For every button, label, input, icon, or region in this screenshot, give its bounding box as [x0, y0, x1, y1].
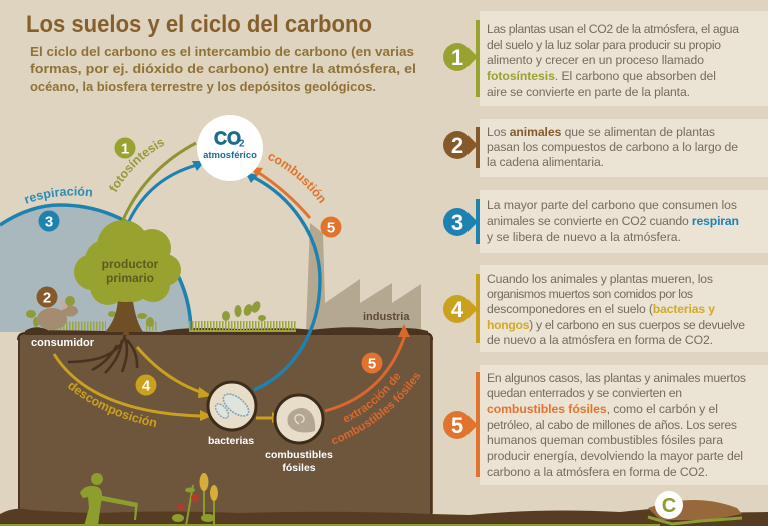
carbon deposit icon — [648, 491, 742, 524]
diagram markers: 3 — [45, 214, 53, 230]
label: respiracion: respiración — [24, 186, 92, 204]
label: combustibles fosiles — [265, 449, 333, 474]
crops — [172, 473, 218, 526]
arc: respiration — [0, 205, 191, 332]
intro text — [30, 44, 416, 94]
tree: productor primario: productor — [102, 257, 159, 271]
panel 4: hongos) y el carbono en sus cuerpos se devuelve — [487, 318, 745, 332]
panel 3: y se libera de nuevo a la atmósfera. — [487, 230, 681, 244]
panel 5 — [443, 365, 768, 485]
label: combustibles fosiles: fósiles — [282, 462, 316, 474]
diagram markers: 5 — [327, 220, 335, 236]
label: combustibles fosiles arc: combustibles fósiles — [332, 373, 420, 444]
farmer — [80, 473, 138, 526]
carbon deposit icon: C — [662, 495, 676, 517]
panel 1: 1 — [451, 45, 463, 70]
CO2 circle: CO — [214, 128, 241, 148]
bottom ground — [0, 509, 768, 526]
label: combustibles fosiles: combustibles — [265, 449, 333, 461]
intro text: formas, por ej. dióxido de carbono) entre la atmósfera, el — [30, 61, 416, 76]
factory silhouette — [306, 223, 421, 332]
arc: combustion — [250, 167, 310, 218]
diagram markers: 2 — [43, 290, 51, 306]
label: combustion: combustión — [268, 154, 324, 204]
panel 3: La mayor parte del carbono que consumen los — [487, 198, 737, 212]
intro text: El ciclo del carbono es el intercambio de carbono (en varias — [30, 44, 414, 59]
panel 4: organismos muertos son comidos por los — [487, 287, 693, 301]
panel 4: de nuevo a la atmósfera en forma de CO2. — [487, 333, 713, 347]
respiration dome — [0, 205, 191, 332]
panel 2: pasan los compuestos de carbono a lo largo de — [487, 140, 738, 154]
panel 2 — [443, 119, 768, 177]
soil block — [18, 327, 433, 518]
panel 2: la cadena alimentaria. — [487, 155, 604, 169]
label: descomposicion: descomposición — [68, 383, 156, 427]
diagram markers: 1 — [121, 140, 129, 158]
panel 5: En algunos casos, las plantas y animales muertos — [487, 371, 746, 385]
arc: blue to CO2 — [129, 161, 205, 221]
panel 5: producir energía, devolviendo la mayor parte del — [487, 449, 743, 463]
panel 1: del suelo y la luz solar para producir su propio — [487, 38, 721, 52]
CO2 circle — [197, 115, 263, 181]
arc: bacteria to CO2 — [245, 172, 320, 390]
panel 5: 5 — [451, 413, 463, 438]
CO2 circle: 2 — [239, 138, 245, 150]
title: Los suelos y el ciclo del carbono — [26, 11, 372, 38]
panel 5: quedan enterrados y se convierten en — [487, 386, 682, 400]
intro text: océano, la biosfera terrestre y los depósitos geológicos. — [30, 79, 376, 94]
decomposition arrowheads — [198, 387, 282, 423]
panel 3 — [443, 190, 768, 253]
panel 5: combustibles fósiles, como el carbón y el — [487, 402, 718, 416]
arcs: decomposition — [54, 347, 274, 418]
label: bacterias: bacterias — [208, 435, 254, 447]
panel 4: Cuando los animales y plantas mueren, los — [487, 272, 713, 286]
label: industria: industria — [363, 311, 410, 323]
panel 3: 3 — [451, 210, 463, 235]
tree: productor primario: primario — [106, 271, 154, 285]
bottom olive line — [0, 524, 660, 526]
panel 2: 2 — [451, 133, 463, 158]
panel 3: animales se convierte en CO2 cuando respiran — [487, 214, 739, 228]
arc: fotosintesis — [123, 143, 196, 220]
panel 1: fotosíntesis. El carbono que absorben del — [487, 69, 716, 83]
grass and small plants — [26, 296, 296, 331]
panel 1: aire se convierte en parte de la planta. — [487, 85, 690, 99]
panel 4: descomponedores en el suelo (bacterias y — [487, 302, 715, 316]
tree: productor primario — [74, 220, 181, 336]
CO2 circle: atmosférico — [203, 150, 257, 161]
diagram markers: 4 — [142, 378, 151, 394]
diagram markers: 5 — [368, 356, 376, 372]
panel 1: Las plantas usan el CO2 de la atmósfera, el agua — [487, 22, 739, 36]
panel 5: carbono a la atmósfera en forma de CO2. — [487, 465, 708, 479]
rabbit consumer — [37, 298, 78, 330]
tree roots — [68, 335, 137, 373]
panel 4 — [443, 265, 768, 352]
fossil circle — [275, 395, 323, 443]
panel 1: alimento y crecer en un proceso llamado — [487, 53, 704, 67]
label: consumidor: consumidor — [31, 337, 95, 349]
diagram markers — [36, 138, 382, 396]
panel 5: humanos queman combustibles fósiles para — [487, 433, 723, 447]
panel 4: 4 — [451, 297, 464, 322]
label: fotosintesis: fotosíntesis — [109, 140, 164, 192]
panel 1 — [443, 11, 768, 106]
panel 5: petróleo, al cabo de millones de años. Los seres — [487, 418, 737, 432]
panel 2: Los animales que se alimentan de plantas — [487, 125, 715, 139]
bacteria circle — [208, 382, 256, 430]
arc: extraction — [325, 324, 410, 411]
label: extraccion: extracción de — [344, 374, 400, 422]
